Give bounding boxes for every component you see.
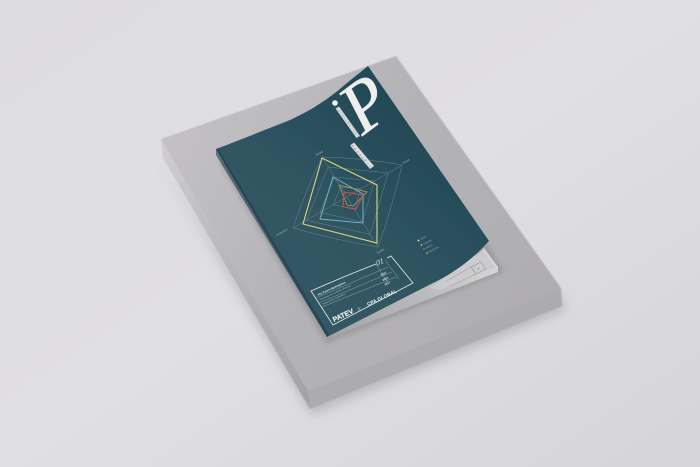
box outline	[311, 256, 413, 325]
table rows: Meeting the challenges	[322, 293, 346, 306]
plus sign: +	[355, 304, 363, 314]
legend labels	[419, 235, 440, 254]
legend markers	[418, 240, 420, 242]
magazine	[216, 56, 504, 344]
logo: PATEV: PATEV	[332, 308, 355, 324]
series: tan	[339, 185, 367, 206]
info box	[311, 256, 413, 325]
series: yellow	[303, 158, 377, 243]
series: blue	[320, 177, 363, 223]
issue number: 01	[375, 256, 385, 268]
inner page table	[445, 267, 476, 286]
letter P: P	[330, 56, 401, 153]
years	[380, 271, 391, 286]
axis labels: Quality	[375, 247, 386, 255]
lower bar with small label: PROPERTY	[350, 144, 372, 169]
table rules	[316, 260, 399, 307]
axis labels: Scope	[401, 157, 411, 165]
years: 2015	[380, 271, 387, 277]
axis labels: Speed	[314, 149, 324, 157]
axis labels: Protection	[275, 227, 289, 237]
legend labels: Asia	[419, 235, 427, 241]
table heading: The Patent Marketplace	[317, 280, 347, 297]
legend	[418, 235, 440, 254]
pedestal left side	[161, 139, 310, 409]
pedestal cast shadow	[160, 160, 566, 414]
logo: iP masthead	[330, 56, 401, 169]
pedestal top	[161, 56, 561, 391]
magazine shadow	[218, 160, 504, 344]
inner page spread	[430, 250, 495, 290]
table rows: Patenting and strategic alliances	[319, 284, 352, 301]
radar grid	[293, 157, 402, 247]
cover	[216, 66, 489, 337]
pedestal front side	[308, 288, 562, 409]
legend labels: Africa	[425, 243, 434, 250]
spine shading	[216, 149, 329, 337]
logo: CPA Global: CPA GLOBAL	[366, 289, 398, 308]
legend labels: Americas	[427, 245, 440, 254]
legend labels: Europe	[422, 238, 433, 246]
i dot	[332, 100, 338, 106]
page block	[327, 248, 498, 338]
pedestal block	[160, 56, 566, 414]
axis labels	[275, 149, 411, 255]
years: 2017	[384, 280, 391, 286]
series: red	[343, 192, 363, 209]
i stem with small label: INTELLECTUAL	[336, 107, 360, 138]
years: 2016	[382, 276, 389, 282]
radar chart	[275, 149, 411, 255]
